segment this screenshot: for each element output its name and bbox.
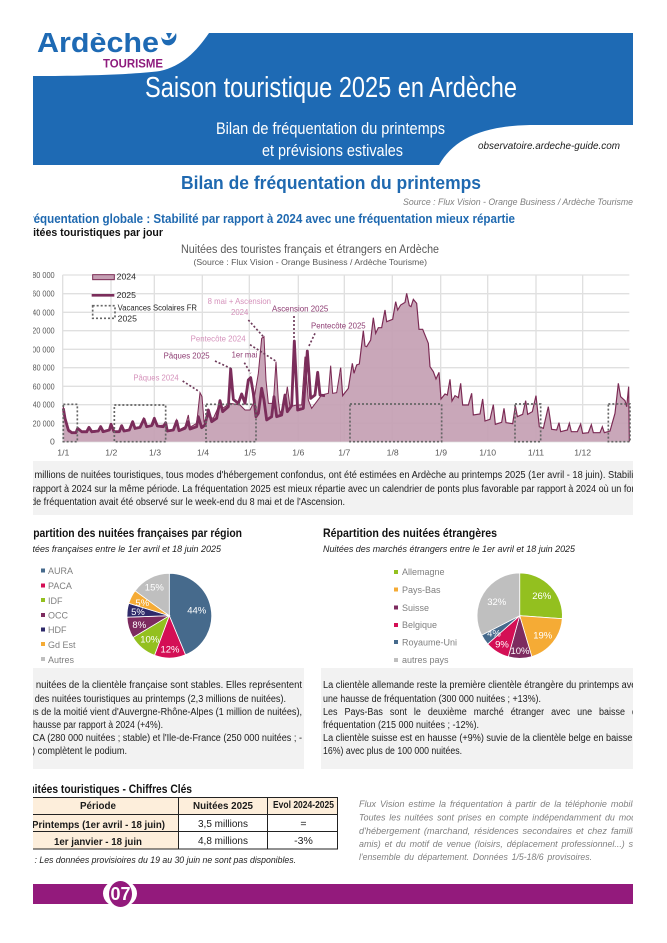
x axis labels: [58, 450, 591, 456]
French pie legend: OCC: [48, 610, 68, 620]
annotations: 1er mai: [232, 350, 257, 360]
section heading: Fréquentation globale : Stabilité par rapport à 2024 avec une fréquentation mieux répartie: [22, 212, 515, 226]
foreign commentary text: une hausse de fréquentation (300 000 nuitées ; +13%).: [323, 694, 541, 705]
logo: TOURISME: [103, 58, 163, 70]
x axis labels: 1/11: [528, 447, 544, 457]
y axis labels: 160 000: [28, 289, 55, 299]
logo: [38, 33, 176, 68]
key figures heading: Nuitées touristiques - Chiffres Clés: [21, 784, 192, 796]
key figures table: -3%: [294, 835, 313, 847]
French pie legend: [41, 566, 76, 665]
foreign pie chart: [477, 573, 562, 658]
French commentary text: Plus de la moitié vient d'Auvergne-Rhône-Alpes (1 million de nuitées),: [21, 707, 302, 718]
methodology note: Toutes les nuitées sont prises en compte indépendamment du mode: [359, 812, 641, 824]
x axis labels: 1/8: [387, 447, 399, 457]
x axis labels: 1/4: [197, 447, 209, 457]
methodology note: amis) et du motif de venue (loisirs, déplacement professionnel...) sur: [359, 839, 642, 850]
French pie legend: IDF: [48, 596, 63, 606]
French pie chart: 5%: [135, 598, 150, 609]
foreign commentary text: fréquentation (215 000 nuitées ; -12%).: [323, 720, 479, 731]
French pie chart: 5%: [131, 607, 145, 618]
annotations: 8 mai + Ascension: [208, 296, 271, 306]
source line: Source : Flux Vision - Orange Business / Ardèche Tourisme: [403, 197, 633, 208]
French pie chart: 44%: [187, 606, 207, 616]
French commentary text: en hausse par rapport à 2024 (+4%).: [21, 720, 163, 731]
y axis labels: 140 000: [28, 307, 55, 317]
x axis labels: 1/7: [338, 447, 351, 457]
chart legend: [92, 272, 197, 323]
French pie legend: Autres: [48, 655, 75, 665]
x axis labels: 1/9: [435, 447, 447, 457]
French pie legend: AURA: [48, 566, 73, 576]
annotations: Ascension 2025: [272, 303, 328, 313]
y axis labels: 100 000: [28, 344, 55, 354]
foreign panel heading: Répartition des nuitées étrangères: [323, 528, 497, 540]
main heading: Bilan de fréquentation du printemps: [181, 173, 481, 193]
sub heading: Nuitées touristiques par jour: [19, 227, 164, 239]
icon: 07 badge: [103, 880, 137, 908]
French panel subheading: Nuitées françaises entre le 1er avril et 18 juin 2025: [19, 544, 222, 555]
foreign pie legend: [394, 567, 457, 665]
French pie chart: [127, 573, 212, 658]
subtitle: [216, 119, 445, 160]
subtitle: et prévisions estivales: [262, 141, 403, 160]
y axis labels: 180 000: [28, 270, 55, 280]
icon: 07 badge: 07: [110, 884, 130, 904]
chart legend: 2025: [117, 290, 136, 300]
key figures table: 1er janvier - 18 juin: [54, 836, 142, 848]
foreign pie legend: Suisse: [402, 603, 429, 613]
subtitle: Bilan de fréquentation du printemps: [216, 119, 445, 138]
annotations: 2024: [231, 307, 248, 317]
x axis labels: 1/10: [479, 447, 496, 457]
French pie legend: Gd Est: [48, 640, 76, 650]
French pie chart: 10%: [140, 634, 160, 646]
header banner: [33, 27, 633, 165]
x axis labels: 1/6: [292, 447, 305, 457]
x axis labels: 1/3: [149, 447, 161, 457]
foreign pie chart: 32%: [487, 597, 507, 608]
y axis labels: 40 000: [33, 400, 55, 410]
text panel: global summary: [17, 461, 641, 515]
key figures table: 4,8 millions: [198, 835, 248, 847]
y axis labels: 20 000: [33, 418, 55, 428]
x axis labels: 1/12: [574, 447, 591, 457]
x axis labels: 1/5: [244, 447, 256, 457]
plot area, second half of the year: [340, 293, 630, 442]
text panel: global summary: pic de fréquentation avait été observé sur le week-end du 8 mai et de l'Ascension.: [17, 497, 345, 508]
panel: foreign nights: [321, 528, 642, 769]
key figures table: 3,5 millions: [198, 818, 248, 830]
foreign pie legend: Belgique: [402, 620, 437, 630]
y axis labels: [33, 272, 54, 444]
key figures table: [32, 797, 338, 849]
chart title: Nuitées des touristes français et étrangers en Ardèche: [181, 244, 439, 256]
x axis labels: 1/1: [57, 447, 70, 457]
panel: French nights by region: [14, 528, 304, 769]
y axis labels: 60 000: [33, 381, 55, 391]
foreign commentary text: [321, 668, 642, 769]
key figures table: =: [300, 818, 307, 830]
methodology note: l'ensemble du département. Données 1/5-18/6 provisoires.: [359, 852, 592, 863]
foreign pie chart: 10%: [510, 646, 530, 657]
key figures table: Evol 2024-2025: [273, 799, 334, 811]
French panel heading: Répartition des nuitées françaises par région: [20, 528, 242, 540]
annotations: [133, 296, 366, 392]
French pie chart: 15%: [145, 582, 164, 594]
foreign pie legend: Allemagne: [402, 567, 445, 577]
key figures table: Période: [80, 800, 116, 812]
chart legend: Vacances Scolaires FR: [118, 302, 197, 312]
French pie legend: HDF: [48, 625, 67, 635]
French commentary text: 66% des nuitées touristiques au printemps (2,3 millions de nuitées).: [14, 694, 286, 705]
foreign pie chart: 19%: [533, 630, 553, 642]
footer bar: [33, 880, 633, 908]
foreign pie legend: Royaume-Uni: [402, 638, 457, 648]
French pie chart: 12%: [160, 644, 180, 656]
methodology note: [359, 799, 642, 863]
footnote: NB : Les données provisioires du 19 au 30 juin ne sont pas disponibles.: [20, 855, 296, 866]
methodology note: d'hébergement (marchand, résidences secondaires et chez famille,: [359, 826, 640, 837]
French commentary text: 5%) complètent le podium.: [19, 746, 127, 757]
foreign pie legend: autres pays: [402, 655, 449, 665]
plot area: [28, 270, 629, 457]
annotations: Pâques 2024: [133, 373, 179, 383]
title: Saison touristique 2025 en Ardèche: [145, 72, 517, 104]
methodology note: Flux Vision estime la fréquentation à partir de la téléphonie mobile.: [359, 799, 640, 810]
French commentary text: PACA (280 000 nuitées ; stable) et l'Ile-de-France (250 000 nuitées ; -: [21, 733, 302, 744]
French commentary text: Les nuitées de la clientèle française sont stables. Elles représentent: [18, 680, 302, 691]
foreign commentary text: La clientèle suisse est en hausse (+9%) suvie de la clientèle belge en baisse (-: [323, 733, 641, 744]
foreign commentary text: 16%) avec plus de 100 000 nuitées.: [323, 746, 462, 757]
foreign pie chart: 4%: [487, 628, 501, 640]
website url: observatoire.ardeche-guide.com: [478, 140, 620, 152]
chart source: (Source : Flux Vision - Orange Business / Ardèche Tourisme): [194, 257, 427, 267]
French pie chart: 8%: [132, 620, 147, 631]
foreign commentary text: La clientèle allemande reste la première clientèle étrangère du printemps avec: [323, 680, 641, 691]
French commentary text: [14, 668, 304, 769]
French pie legend: PACA: [48, 581, 72, 591]
annotations: Pentecôte 2024: [191, 333, 246, 343]
annotations: Pâques 2025: [164, 351, 210, 361]
logo: Ardèche: [37, 27, 159, 59]
foreign pie chart: 9%: [495, 640, 509, 650]
y axis labels: 120 000: [28, 326, 55, 336]
key figures table: Printemps (1er avril - 18 juin): [32, 819, 165, 831]
foreign panel subheading: Nuitées des marchés étrangers entre le 1er avril et 18 juin 2025: [323, 544, 576, 555]
chart legend: 2024: [117, 272, 136, 282]
key figures table: Nuitées 2025: [193, 800, 253, 812]
foreign pie chart: 26%: [532, 591, 552, 602]
x axis labels: 1/2: [105, 447, 118, 457]
y axis labels: 0: [50, 437, 55, 447]
chart legend: 2025: [118, 313, 137, 323]
line chart: daily overnight stays: [28, 244, 630, 457]
annotations: Pentecôte 2025: [311, 320, 366, 330]
foreign pie legend: Pays-Bas: [402, 585, 441, 595]
y axis labels: 80 000: [33, 363, 55, 373]
